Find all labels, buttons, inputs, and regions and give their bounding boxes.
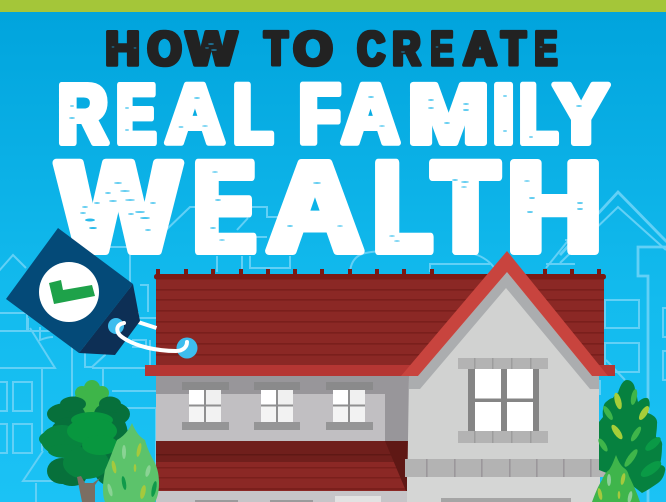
title: how to create: O bbox=[294, 23, 332, 76]
check mark badge bbox=[39, 262, 99, 322]
title: how to create: A bbox=[464, 23, 496, 76]
eaves bbox=[145, 365, 415, 376]
light crown bbox=[70, 380, 109, 415]
dormer gable bbox=[401, 251, 608, 502]
tag back string bbox=[138, 322, 156, 328]
mid foliage bbox=[39, 425, 109, 479]
tag hole bbox=[108, 318, 124, 334]
left tree bbox=[39, 380, 130, 502]
tag body bbox=[6, 228, 133, 353]
title: how to create bbox=[106, 23, 557, 76]
title: real family: A bbox=[166, 67, 224, 161]
lower roof bbox=[156, 441, 409, 491]
window 2 bbox=[254, 382, 300, 430]
title: how to create: C bbox=[358, 23, 385, 76]
title: how to create: H bbox=[106, 23, 140, 76]
title: how to create: T bbox=[502, 23, 525, 76]
right bush bbox=[592, 455, 640, 502]
window 3 bbox=[326, 382, 373, 430]
title: wealth: W bbox=[59, 136, 178, 279]
main roof bbox=[154, 269, 606, 366]
left bush bbox=[103, 423, 159, 502]
dormer window bbox=[458, 358, 548, 443]
title: real family: I bbox=[493, 67, 514, 161]
dark foliage bbox=[47, 396, 130, 486]
title: wealth: E bbox=[194, 136, 255, 279]
title: how to create: O bbox=[148, 23, 181, 76]
title: real family: F bbox=[299, 67, 340, 161]
title: wealth: H bbox=[508, 136, 601, 279]
title: how to create: R bbox=[393, 23, 420, 76]
background neighbourhood outlines bbox=[0, 192, 666, 502]
title: wealth: A bbox=[268, 136, 362, 279]
title: real family: L bbox=[520, 67, 557, 161]
title: real family: E bbox=[117, 67, 156, 161]
lower wall bbox=[156, 491, 408, 502]
price tag bbox=[6, 228, 198, 358]
title: real family: Y bbox=[554, 67, 608, 161]
bright foliage bbox=[67, 412, 118, 455]
trunk bbox=[77, 476, 100, 502]
title: how to create: E bbox=[431, 23, 453, 76]
title: wealth: L bbox=[374, 136, 431, 279]
right tree bbox=[597, 380, 665, 493]
title: how to create: E bbox=[535, 23, 557, 76]
title: how to create: T bbox=[265, 23, 287, 76]
title: real family bbox=[58, 67, 608, 161]
house bbox=[145, 251, 615, 502]
string bbox=[117, 323, 187, 351]
end bead bbox=[176, 338, 198, 358]
title: real family: R bbox=[58, 67, 107, 161]
window 1 bbox=[182, 382, 229, 430]
title: how to create: W bbox=[187, 23, 237, 76]
stone band bbox=[405, 459, 607, 502]
title: real family: A bbox=[342, 67, 399, 161]
title: wealth bbox=[59, 136, 601, 279]
title: wealth: T bbox=[434, 136, 498, 279]
title: real family: M bbox=[408, 67, 488, 161]
upper wall bbox=[156, 376, 409, 441]
title: real family: L bbox=[234, 67, 271, 161]
top green bar bbox=[0, 0, 666, 12]
